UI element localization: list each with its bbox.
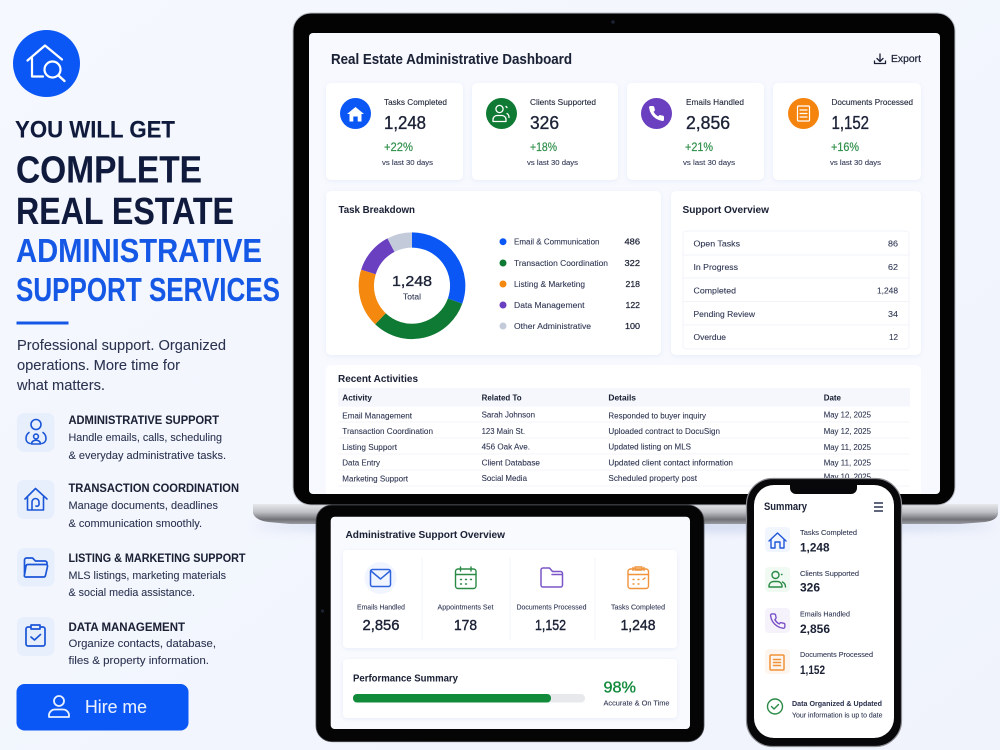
donut centre total: [392, 273, 432, 302]
panel: task breakdown: Task Breakdown: [338, 205, 415, 216]
KPI card: emails handled: 2,856: [686, 113, 730, 133]
export action: [874, 54, 921, 65]
button: hire me: [16, 684, 188, 730]
phone row: emails handled: 2,856: [800, 624, 830, 636]
table rows: Data Entry: [342, 459, 380, 468]
phone row: clients supported: Clients Supported: [800, 569, 859, 578]
feature: transaction coordination: & communication smoothly.: [68, 518, 202, 530]
support table rows: 1,248: [877, 286, 898, 296]
phone row: clients supported: 326: [800, 583, 820, 595]
phone status: data organized: Your information is up to date: [792, 713, 883, 720]
legend: [500, 236, 640, 331]
KPI card: documents processed: +16%: [831, 140, 859, 154]
KPI card: tasks completed: 1,248: [384, 113, 426, 133]
stat: emails handled: 2,856: [362, 618, 400, 634]
support table rows: 62: [888, 262, 898, 272]
legend: Transaction Coordination: [514, 258, 608, 268]
icon: menu: [874, 503, 883, 511]
tablet: Administrative Support Overview: [346, 529, 506, 541]
headline: YOU WILL GET: [15, 116, 175, 144]
panel: support overview: Support Overview: [682, 205, 769, 216]
stat: tasks completed: [611, 567, 665, 634]
table rows: May 12, 2025: [824, 411, 872, 420]
table header: [342, 394, 842, 403]
panel: performance summary: Accurate & On Time: [604, 699, 670, 708]
stat: appointments set: 178: [454, 618, 477, 634]
panel: performance summary: 98%: [604, 680, 636, 697]
panel: support overview: [671, 191, 921, 355]
headline: [15, 116, 280, 308]
donut centre total: Total: [403, 292, 421, 302]
feature: administrative support: Handle emails, calls, scheduling: [68, 432, 222, 444]
tablet screen: [331, 517, 690, 729]
panel: tablet stats: [343, 550, 677, 648]
tablet: [316, 505, 704, 742]
phone row: documents processed: Documents Processed: [800, 650, 873, 659]
headline: SUPPORT SERVICES: [16, 271, 280, 308]
phone row: tasks completed: 1,248: [800, 543, 830, 555]
feature: data management: [17, 617, 216, 667]
panel: performance summary: [343, 659, 677, 718]
table rows: Uploaded contract to DocuSign: [608, 427, 720, 436]
legend: 122: [626, 300, 640, 310]
table rows: Listing Support: [342, 443, 398, 452]
table rows: Social Media: [482, 474, 528, 483]
table rows: May 11, 2025: [824, 458, 872, 467]
support table rows: Open Tasks: [694, 239, 740, 249]
KPI card: clients supported: [472, 83, 618, 180]
phone: Summary: [764, 501, 808, 513]
support table rows: 12: [889, 332, 898, 342]
legend: 322: [624, 258, 640, 268]
table rows: Updated client contact information: [608, 458, 733, 467]
table rows: May 10, 2025: [824, 472, 872, 482]
table rows: May 12, 2025: [824, 427, 872, 436]
KPI card: documents processed: Documents Processed: [832, 97, 913, 107]
table rows: 123 Main St.: [482, 427, 525, 436]
phone: [746, 478, 902, 746]
legend: Listing & Marketing: [514, 279, 585, 289]
feature: listing and marketing support: MLS listings, marketing materials: [68, 570, 226, 582]
table rows: Email Management: [342, 411, 413, 420]
panel: recent activities table: Recent Activities: [338, 374, 418, 385]
progress bar: [353, 694, 585, 702]
button: hire me: Hire me: [85, 697, 147, 717]
phone row: documents processed: [765, 649, 873, 677]
stat: tasks completed: 1,248: [620, 618, 656, 634]
table header: Activity: [342, 394, 373, 403]
phone row: emails handled: [765, 608, 850, 636]
dashboard title: Real Estate Administrative Dashboard: [331, 52, 572, 68]
table header: Related To: [482, 394, 522, 403]
headline: COMPLETE: [16, 150, 202, 192]
KPI card: clients supported: +18%: [530, 140, 557, 154]
table header: Details: [608, 394, 637, 403]
KPI card: documents processed: [773, 83, 921, 180]
panel: performance summary: Performance Summary: [353, 674, 458, 685]
phone screen: [754, 485, 894, 738]
table rows: Updated listing on MLS: [608, 443, 691, 452]
feature: transaction coordination: Manage documents, deadlines: [68, 500, 218, 512]
feature: listing and marketing support: [17, 548, 246, 599]
intro paragraph: Professional support. Organized: [17, 337, 226, 354]
logo: house with magnifier: [13, 30, 80, 97]
laptop bezel: [293, 13, 955, 505]
table rows: Scheduled property post: [608, 474, 698, 483]
feature: listing and marketing support: LISTING & MARKETING SUPPORT: [68, 551, 246, 565]
stat: appointments set: [438, 567, 494, 634]
support table rows: 86: [888, 239, 898, 249]
intro paragraph: what matters.: [16, 377, 105, 394]
feature: data management: DATA MANAGEMENT: [68, 620, 186, 634]
KPI card: clients supported: Clients Supported: [530, 97, 596, 107]
intro paragraph: operations. More time for: [17, 357, 180, 374]
table rows: Client Database: [482, 459, 541, 468]
legend: 218: [626, 279, 640, 289]
support table rows: Overdue: [694, 332, 726, 342]
KPI card: tasks completed: vs last 30 days: [382, 158, 433, 167]
phone status: data organized: Data Organized & Updated: [792, 699, 882, 708]
KPI card: clients supported: vs last 30 days: [527, 158, 578, 167]
feature: administrative support: & everyday administrative tasks.: [68, 450, 226, 462]
phone body: [746, 478, 902, 746]
KPI card: emails handled: vs last 30 days: [683, 158, 735, 167]
phone row: tasks completed: Tasks Completed: [800, 528, 857, 537]
phone row: tasks completed: [765, 527, 857, 555]
donut centre total: 1,248: [392, 273, 432, 290]
laptop: [253, 13, 998, 532]
KPI card: clients supported: 326: [530, 113, 559, 133]
table header: Date: [824, 394, 842, 403]
KPI card: emails handled: +21%: [685, 140, 713, 154]
intro paragraph: [16, 337, 226, 394]
panel: recent activities table: [326, 365, 921, 494]
table rows: Transaction Coordination: [342, 427, 433, 436]
KPI card: emails handled: Emails Handled: [686, 97, 744, 107]
stat: documents processed: [516, 568, 586, 634]
phone row: clients supported: [765, 567, 859, 595]
stat: appointments set: Appointments Set: [438, 602, 494, 612]
panel: task breakdown: [326, 191, 661, 355]
support table rows: [694, 239, 898, 342]
stat: documents processed: 1,152: [535, 618, 566, 634]
legend: Email & Communication: [514, 236, 600, 246]
table rows: May 11, 2025: [824, 443, 872, 452]
support table rows: In Progress: [694, 262, 738, 272]
table rows: Marketing Support: [342, 474, 409, 483]
legend: 486: [624, 236, 640, 246]
phone row: emails handled: Emails Handled: [800, 610, 850, 619]
feature: transaction coordination: [17, 480, 239, 530]
table rows: [342, 411, 872, 483]
KPI card: documents processed: vs last 30 days: [830, 158, 881, 167]
table rows: 456 Oak Ave.: [482, 443, 530, 452]
support table rows: 34: [888, 309, 898, 319]
phone status: data organized: [768, 699, 883, 720]
phone row: documents processed: 1,152: [800, 665, 825, 677]
stat: documents processed: Documents Processed: [516, 602, 586, 612]
feature: listing and marketing support: & social media assistance.: [68, 587, 195, 599]
legend: Other Administrative: [514, 321, 591, 331]
KPI card: documents processed: 1,152: [832, 113, 869, 133]
support table rows: Pending Review: [694, 309, 756, 319]
KPI card: emails handled: [627, 83, 764, 180]
laptop base: [253, 504, 998, 524]
table rows: Responded to buyer inquiry: [608, 411, 706, 420]
KPI card: tasks completed: Tasks Completed: [384, 97, 447, 107]
legend: Data Management: [514, 300, 585, 310]
stat: tasks completed: Tasks Completed: [611, 602, 665, 612]
feature: administrative support: [17, 413, 226, 462]
feature: administrative support: ADMINISTRATIVE SUPPORT: [68, 413, 220, 427]
donut chart: [366, 240, 458, 331]
stat: emails handled: Emails Handled: [357, 602, 405, 612]
support table rows: Completed: [694, 286, 736, 296]
feature: data management: Organize contacts, database,: [68, 638, 216, 650]
headline: ADMINISTRATIVE: [16, 232, 262, 269]
feature: data management: files & property information.: [68, 655, 209, 667]
legend: 100: [625, 321, 640, 331]
KPI card: tasks completed: +22%: [384, 140, 413, 154]
laptop screen: [309, 33, 940, 494]
tablet bezel: [316, 505, 704, 742]
headline: REAL ESTATE: [16, 191, 234, 233]
export action: Export: [891, 54, 921, 65]
table rows: Sarah Johnson: [482, 411, 535, 420]
stat: emails handled: [357, 562, 405, 634]
feature: transaction coordination: TRANSACTION COORDINATION: [68, 481, 239, 495]
KPI card: tasks completed: [326, 83, 463, 180]
